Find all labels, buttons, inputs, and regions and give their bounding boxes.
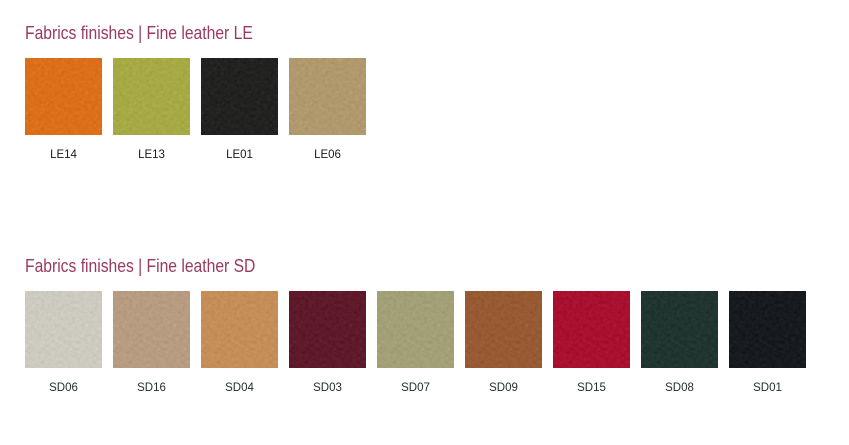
swatch: SD15	[553, 291, 630, 368]
swatch: SD09	[465, 291, 542, 368]
swatch: SD07	[377, 291, 454, 368]
label: LE01: LE01	[226, 149, 253, 161]
label: LE14: LE14	[50, 149, 77, 161]
label: SD01: SD01	[753, 382, 782, 394]
swatch: SD01	[729, 291, 806, 368]
swatch: SD16	[113, 291, 190, 368]
swatch: SD06	[25, 291, 102, 368]
label: SD03: SD03	[313, 382, 342, 394]
label: LE06: LE06	[314, 149, 341, 161]
swatch: SD04	[201, 291, 278, 368]
label: SD15: SD15	[577, 382, 606, 394]
swatch: SD03	[289, 291, 366, 368]
heading: Fine leather SD: Fabrics finishes | Fine leather SD	[25, 256, 255, 276]
swatch: SD08	[641, 291, 718, 368]
label: LE13: LE13	[138, 149, 165, 161]
swatch: LE13	[113, 58, 190, 135]
label: SD09: SD09	[489, 382, 518, 394]
label: SD16: SD16	[137, 382, 166, 394]
label: SD07: SD07	[401, 382, 430, 394]
heading: Fine leather LE: Fabrics finishes | Fine leather LE	[25, 23, 253, 43]
label: SD06: SD06	[49, 382, 78, 394]
swatch: LE01	[201, 58, 278, 135]
label: SD04: SD04	[225, 382, 254, 394]
label: SD08: SD08	[665, 382, 694, 394]
swatch: LE14	[25, 58, 102, 135]
swatch: LE06	[289, 58, 366, 135]
